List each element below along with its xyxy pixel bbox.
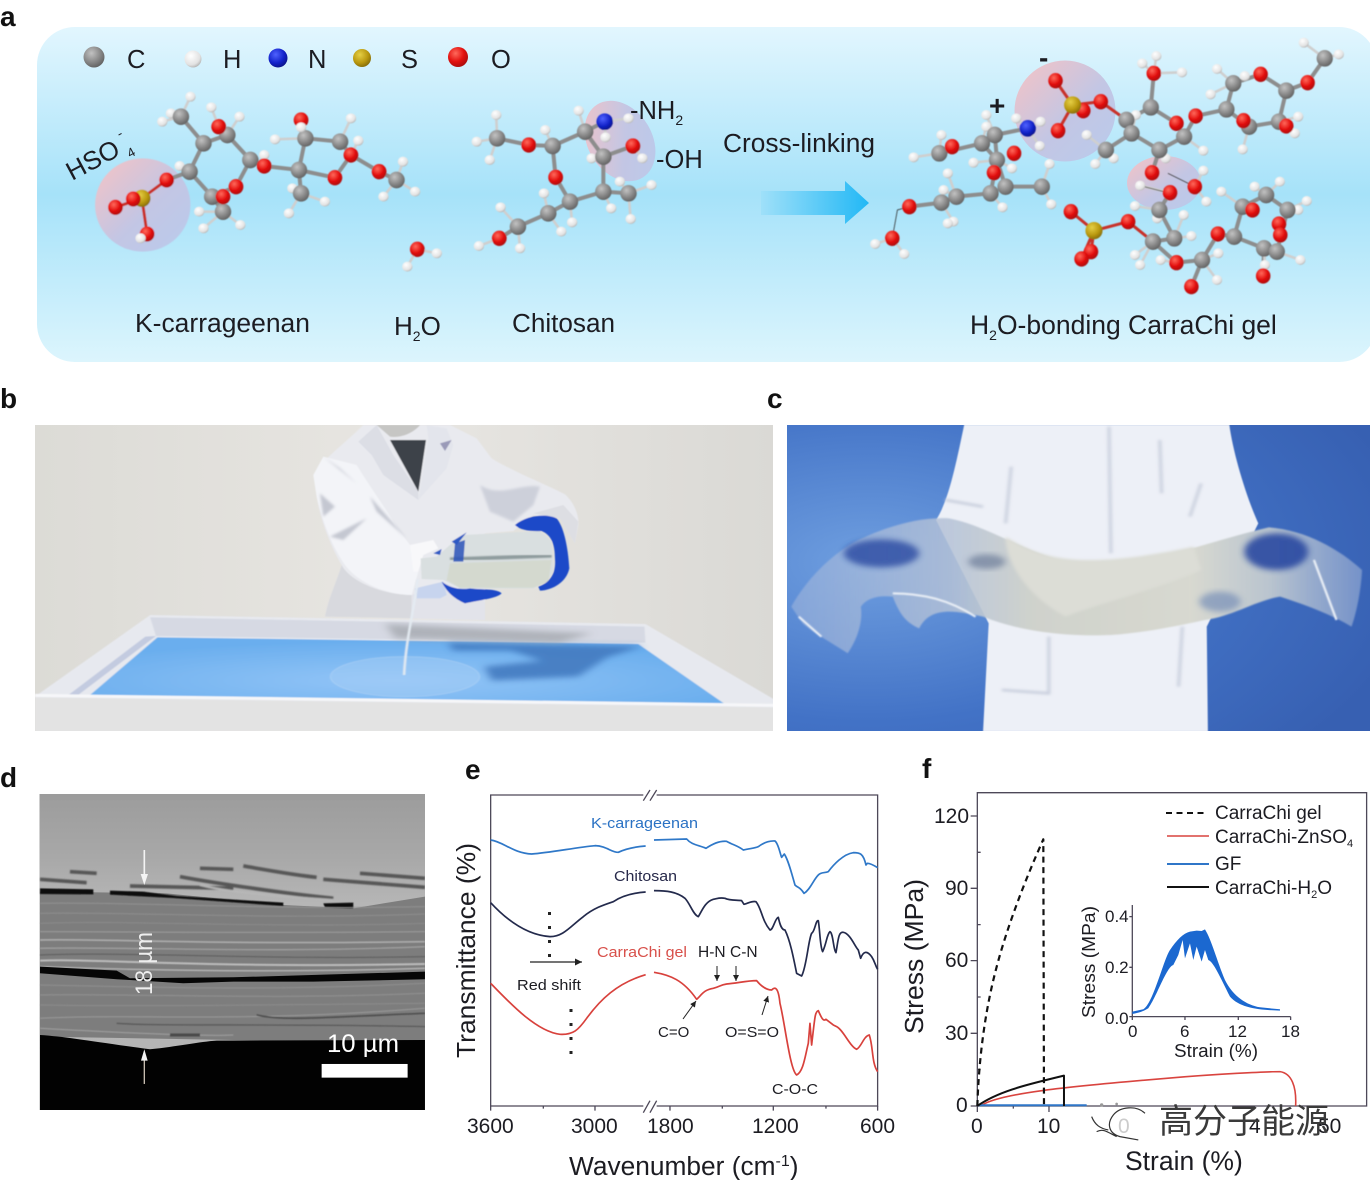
peak label: C=O: C=O	[658, 1024, 689, 1041]
legend	[1166, 803, 1353, 901]
x tick labels: 0	[971, 1115, 983, 1138]
panel label f: f	[922, 753, 932, 784]
shadow on tray	[448, 643, 643, 681]
tray	[35, 615, 775, 732]
label: H2O: O	[421, 311, 441, 341]
inset y tick labels: 0.2	[1105, 958, 1129, 977]
peak label: H-N: H-N	[698, 944, 726, 961]
label: cross-linking: Cross-linking	[723, 130, 875, 158]
gloves	[442, 516, 569, 603]
curve: CarraChi-ZnSO4	[982, 1072, 1296, 1106]
curve label: K-carrageenan: K-carrageenan	[591, 816, 698, 832]
legend: O	[1317, 878, 1332, 899]
label: K-carrageenan: K-carrageenan	[135, 310, 310, 338]
panel a: molecular schematic	[37, 27, 1370, 362]
black gap	[40, 967, 425, 983]
x axis title: -1	[776, 1153, 790, 1170]
molecule: K-carrageenan	[95, 92, 420, 252]
legend: atom types: S	[401, 46, 418, 74]
inset axes and curve	[1129, 905, 1291, 1020]
substrate black	[40, 1035, 425, 1110]
tick labels	[467, 1115, 895, 1138]
label: Chitosan: Chitosan	[512, 310, 615, 338]
arrow: cross-linking direction	[761, 181, 869, 224]
panel f: stress-strain chart	[901, 793, 1367, 1176]
label: HSO4-: -	[114, 125, 126, 141]
label: HSO4-	[59, 124, 138, 190]
inset x tick labels	[1128, 1022, 1300, 1041]
molecule: chitosan	[472, 106, 657, 253]
tick labels: 3000	[571, 1115, 618, 1138]
gel sheet	[791, 518, 1362, 653]
curve: CarraChi gel	[977, 839, 1044, 1106]
label: H2O-bonding CarraChi gel: O-bonding CarraChi gel	[997, 310, 1277, 340]
lab coat	[936, 425, 1258, 732]
legend: 2	[1311, 889, 1317, 901]
inset x tick labels: 12	[1228, 1022, 1247, 1041]
layered film body	[40, 892, 425, 1043]
wall shadow	[386, 624, 593, 643]
watermark: logo	[1092, 1103, 1145, 1140]
molecule: water	[402, 242, 442, 272]
curve label: Chitosan: Chitosan	[614, 868, 677, 885]
x tick labels: 10	[1037, 1115, 1060, 1138]
legend: atom types	[84, 46, 511, 74]
gel pool	[331, 657, 480, 697]
upper fold texture	[40, 866, 425, 900]
label: HSO4-: 4	[124, 144, 138, 161]
y tick labels: 60	[945, 949, 968, 972]
curve: CarraChi-H2O	[977, 1076, 1064, 1106]
y tick labels: 0	[956, 1094, 968, 1117]
bottle	[421, 531, 553, 588]
FTIR frame and ticks	[491, 790, 878, 1113]
lab coat	[313, 425, 578, 620]
liquid stream	[404, 579, 418, 675]
label: -NH2: 2	[675, 112, 683, 128]
curve label: CarraChi gel: CarraChi gel	[597, 944, 687, 961]
person pouring from bottle	[313, 425, 578, 620]
label: 18 µm thickness: 18 µm	[131, 932, 158, 995]
panel label a: a	[0, 1, 16, 32]
annotations: peak markers and arrows	[530, 912, 768, 1054]
y tick labels: 30	[945, 1022, 968, 1045]
molecule: H2O-bonding CarraChi gel	[870, 38, 1344, 294]
legend: 4	[1347, 838, 1353, 850]
charge region: water bridge	[1127, 156, 1201, 210]
panel label c: c	[767, 383, 783, 414]
legend: CarraChi-H	[1215, 878, 1311, 899]
label: -OH: -OH	[656, 146, 703, 174]
legend: atom types: C	[127, 46, 145, 74]
label: 10 µm scale: 10 µm	[327, 1030, 399, 1058]
label: positive charge: +	[989, 90, 1005, 121]
inset x tick labels: 18	[1281, 1022, 1300, 1041]
charge region: sulfate group	[1014, 60, 1116, 162]
spectrum: K-carrageenan	[491, 839, 878, 893]
top crack	[40, 888, 353, 908]
inset x tick labels: 0	[1128, 1022, 1137, 1041]
label: H2O-bonding CarraChi gel: 2	[989, 327, 997, 343]
y axis title: Stress (MPa)	[901, 879, 929, 1034]
x tick labels: 0	[1118, 1115, 1130, 1138]
label: H2O-bonding CarraChi gel: H	[970, 310, 989, 340]
panel label e: e	[465, 754, 481, 785]
y tick labels	[934, 805, 969, 1117]
inset x tick labels: 6	[1180, 1022, 1189, 1041]
inset y tick labels: 0.4	[1105, 907, 1129, 926]
charge region: chitosan amine and hydroxyl	[570, 88, 670, 194]
y axis title: Transmittance (%)	[451, 843, 481, 1058]
inset chart	[1079, 905, 1300, 1061]
inset y tick labels: 0.0	[1105, 1009, 1129, 1028]
panel c: photo of flexible gel sheet	[787, 425, 1370, 732]
inset y axis title: Stress (MPa)	[1079, 906, 1099, 1018]
peak label: C-O-C: C-O-C	[772, 1081, 818, 1098]
panel b: photo of casting gel in a tray	[35, 425, 775, 732]
legend: CarraChi gel	[1215, 803, 1322, 824]
peak label: C-N: C-N	[730, 944, 758, 961]
legend: CarraChi-ZnSO	[1215, 827, 1347, 848]
inset y tick labels	[1105, 907, 1129, 1028]
tick labels: 600	[860, 1115, 895, 1138]
y tick labels: 120	[934, 805, 969, 828]
panel d: SEM cross-section	[40, 794, 425, 1110]
panel a background	[37, 27, 1370, 362]
x tick labels: 4	[1249, 1115, 1261, 1138]
label: H2O: 2	[413, 328, 421, 344]
gel highlights and hands	[799, 533, 1336, 637]
scale bar	[322, 1064, 408, 1078]
label: HSO4-: HSO	[61, 133, 125, 186]
tick labels: 1200	[752, 1115, 799, 1138]
frame and ticks	[971, 793, 1367, 1112]
striations	[40, 903, 425, 1035]
legend: atom types: O	[491, 46, 511, 74]
y tick labels: 90	[945, 877, 968, 900]
tick labels: 1800	[647, 1115, 694, 1138]
spectrum: chitosan	[491, 891, 878, 976]
thickness arrows	[141, 850, 148, 1084]
legend: atom types: H	[223, 46, 241, 74]
coat folds	[945, 427, 1201, 693]
panel label b: b	[0, 383, 17, 414]
spectrum: CarraChi gel	[491, 972, 878, 1075]
legend: atom types: N	[308, 46, 326, 74]
x axis title: Strain (%)	[1125, 1146, 1243, 1176]
x tick labels: 50	[1318, 1115, 1341, 1138]
label: H2O: H	[394, 311, 413, 341]
note: red shift: Red shift	[517, 977, 582, 994]
inset x axis title: Strain (%)	[1174, 1041, 1258, 1061]
label: -NH2: -NH	[630, 97, 675, 125]
curve: GF	[977, 1104, 1087, 1106]
legend: GF	[1215, 854, 1241, 875]
tick labels: 3600	[467, 1115, 514, 1138]
panel label d: d	[0, 762, 17, 793]
x tick labels	[971, 1115, 1341, 1138]
peak label: O=S=O: O=S=O	[725, 1024, 779, 1041]
watermark: text: 高分子能源	[1159, 1094, 1329, 1143]
label: negative charge: -	[1039, 42, 1048, 73]
panel e: FTIR spectra	[451, 790, 895, 1180]
